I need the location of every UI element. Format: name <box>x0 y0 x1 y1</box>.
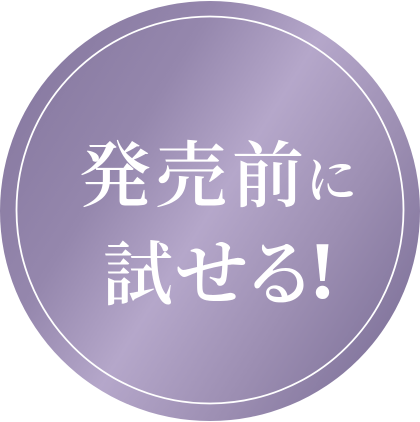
heading line 1: 発売前に: 売 <box>155 137 227 217</box>
heading line 1: 発売前に: 前 <box>232 137 304 217</box>
heading line 1: 発売前に: 発 <box>79 137 151 217</box>
heading line 2: 試せる!: せ <box>175 234 248 315</box>
heading line 2: 試せる!: 試 <box>103 238 173 315</box>
heading line 1: 発売前に <box>79 137 357 217</box>
heading line 2: 試せる!: る <box>243 234 316 315</box>
heading line 1: 発売前に: に <box>306 154 357 210</box>
heading line 2: 試せる! <box>103 225 336 316</box>
heading line 2: 試せる!: ! <box>309 225 336 316</box>
